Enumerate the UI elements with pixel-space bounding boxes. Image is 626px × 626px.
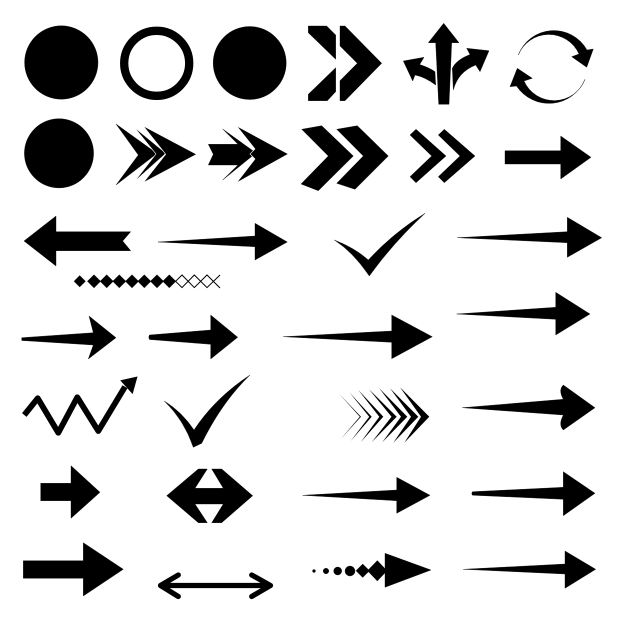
icon: double-headed feather arrow <box>208 126 288 183</box>
icon: hexagonal double arrow <box>167 469 253 523</box>
icon: tapered arrow F <box>457 292 590 335</box>
icon: slim check mark <box>334 213 425 276</box>
icon: dotted trail arrow <box>312 553 431 587</box>
icon: large block arrow <box>23 543 123 596</box>
icon: bold double chevron <box>301 126 388 191</box>
icon: ribbon left arrow <box>24 216 131 266</box>
icon: double-ended line arrow <box>160 575 270 596</box>
icon: solid circle 2 <box>213 26 286 100</box>
icon: block right arrow <box>505 136 591 179</box>
icon: bold check mark <box>164 375 250 447</box>
icon: diamond progress row <box>74 275 220 288</box>
icon: tapered arrow A <box>158 223 287 260</box>
icon: tapered arrow I <box>463 551 596 588</box>
icon: tapered arrow G <box>303 477 430 513</box>
icon: tapered arrow D <box>149 315 238 359</box>
icon: fading chevron stack <box>339 387 429 443</box>
icon: three-way arrows <box>403 23 489 104</box>
icon: zigzag rising arrow <box>24 377 137 433</box>
icon: triple pointed chevron <box>116 124 197 185</box>
icon: solid circle 1 <box>25 26 98 99</box>
icon: thin double chevron <box>410 129 475 183</box>
icon: refresh cycle arrows <box>510 31 593 103</box>
icon: small block arrow <box>41 466 100 518</box>
icon: tapered arrow C <box>22 316 116 359</box>
icon: tapered arrow B <box>457 217 602 257</box>
icon: cut double chevron <box>308 26 382 101</box>
icon: tapered arrow E <box>283 315 432 359</box>
icon: solid circle 3 <box>24 119 94 188</box>
icon: ring <box>124 31 189 96</box>
icon: tapered arrow H <box>472 472 595 516</box>
icon: rounded-head tapered arrow <box>462 385 595 430</box>
